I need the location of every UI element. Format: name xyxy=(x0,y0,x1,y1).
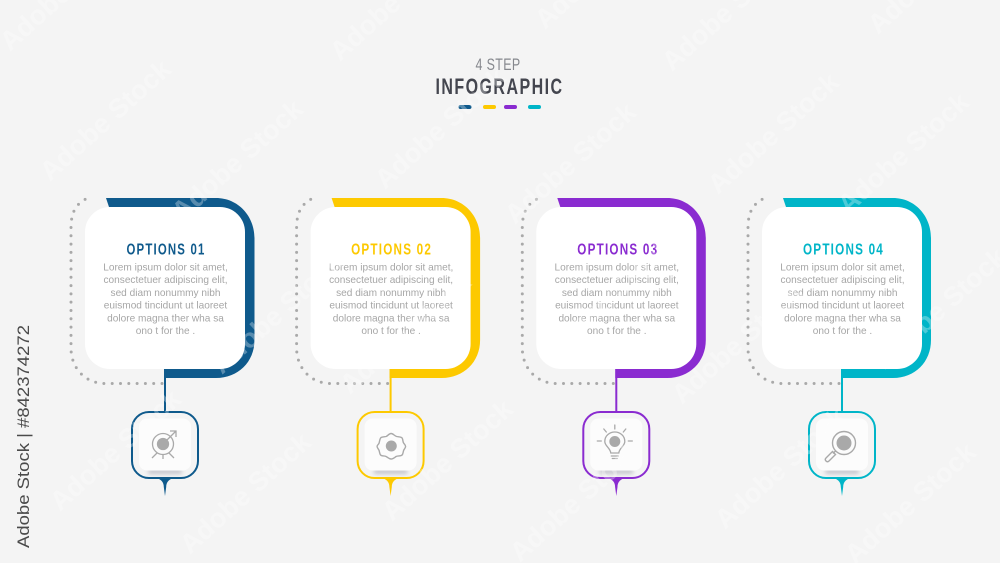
watermark pattern: Adobe Stock xyxy=(709,401,852,534)
card text xyxy=(780,262,905,337)
watermark pattern: Adobe Stock xyxy=(174,426,317,559)
card text xyxy=(103,262,228,337)
card text: sed diam nonummy nibh xyxy=(111,288,220,299)
watermark pattern: Adobe Stock xyxy=(536,231,679,364)
card text: Lorem ipsum dolor sit amet, xyxy=(329,262,453,274)
icon: target with arrow xyxy=(152,431,176,459)
icon box xyxy=(583,412,649,496)
watermark pattern: Adobe Stock xyxy=(206,246,349,379)
dotted outline xyxy=(748,198,839,384)
card text: dolore magna ther wha sa xyxy=(558,314,676,324)
panel: options 03 xyxy=(522,198,706,496)
connector line xyxy=(841,369,843,412)
card text: dolore magna ther wha sa xyxy=(333,314,450,324)
card heading: OPTIONS 01 xyxy=(126,242,206,258)
white card xyxy=(762,207,922,369)
watermark pattern: Adobe Stock xyxy=(334,266,477,399)
card text: consectetuer adipiscing elit, xyxy=(104,275,228,286)
card text: ono t for the . xyxy=(813,326,872,337)
watermark pattern: Adobe Stock xyxy=(376,393,519,526)
card text: sed diam nonummy nibh xyxy=(336,288,446,299)
icon box xyxy=(132,412,198,496)
card text: Lorem ipsum dolor sit amet, xyxy=(103,262,228,274)
card text: dolore magna ther wha sa xyxy=(107,314,224,324)
connector line xyxy=(615,369,617,412)
card text: euismod tincidunt ut laoreet xyxy=(329,301,453,312)
icon box xyxy=(358,412,424,496)
coloured frame xyxy=(783,198,931,378)
connector line xyxy=(390,369,392,412)
watermark pattern: Adobe Stock xyxy=(832,86,975,219)
card text: Lorem ipsum dolor sit amet, xyxy=(555,262,679,274)
card text: euismod tincidunt ut laoreet xyxy=(555,301,679,312)
card text: euismod tincidunt ut laoreet xyxy=(104,301,227,312)
coloured frame xyxy=(557,198,706,378)
dotted outline xyxy=(522,198,613,384)
white card xyxy=(311,207,471,369)
card text xyxy=(329,262,453,337)
connector line xyxy=(164,369,166,412)
watermark pattern: Adobe Stock xyxy=(702,66,845,199)
card text: consectetuer adipiscing elit, xyxy=(555,275,679,286)
card heading: OPTIONS 03 xyxy=(577,242,658,258)
icon box xyxy=(809,412,875,496)
panel: options 02 xyxy=(297,198,480,496)
card text: sed diam nonummy nibh xyxy=(562,288,672,299)
watermark pattern: Adobe Stock xyxy=(499,96,642,229)
card heading: OPTIONS 02 xyxy=(351,242,432,258)
dotted outline xyxy=(297,198,388,384)
card text: euismod tincidunt ut laoreet xyxy=(781,301,904,312)
card heading: OPTIONS 04 xyxy=(803,242,884,258)
coloured frame xyxy=(332,198,480,378)
title xyxy=(436,55,564,109)
watermark pattern: Adobe Stock xyxy=(369,61,512,194)
side credit: Adobe Stock id: Adobe Stock | #842374272 xyxy=(15,325,33,548)
subtitle: 4 step: 4 STEP xyxy=(476,55,520,74)
panel: options 01 xyxy=(71,198,254,496)
card text: consectetuer adipiscing elit, xyxy=(329,275,453,286)
card text xyxy=(555,262,679,337)
white card xyxy=(536,207,696,369)
panel: options 04 xyxy=(748,198,931,496)
card text: dolore magna ther wha sa xyxy=(784,314,901,324)
heading: infographic: INFOGRAPHIC xyxy=(436,74,564,99)
watermark pattern: Adobe Stock xyxy=(44,383,187,516)
icon: magnifier xyxy=(825,432,856,462)
watermark pattern: Adobe Stock xyxy=(166,93,309,226)
card text: consectetuer adipiscing elit, xyxy=(780,275,904,286)
watermark pattern: Adobe Stock xyxy=(34,53,177,186)
card text: Lorem ipsum dolor sit amet, xyxy=(780,262,905,274)
card text: sed diam nonummy nibh xyxy=(788,288,897,299)
icon: light bulb xyxy=(597,425,632,458)
coloured frame xyxy=(106,198,254,378)
colour legend dashes xyxy=(458,105,541,109)
icon: gear badge xyxy=(377,434,406,459)
card text: ono t for the . xyxy=(361,326,421,337)
card text: ono t for the . xyxy=(136,326,195,337)
dotted outline xyxy=(71,198,162,384)
watermark pattern: Adobe Stock xyxy=(666,276,809,409)
card text: ono t for the . xyxy=(587,326,647,337)
white card xyxy=(85,207,245,369)
